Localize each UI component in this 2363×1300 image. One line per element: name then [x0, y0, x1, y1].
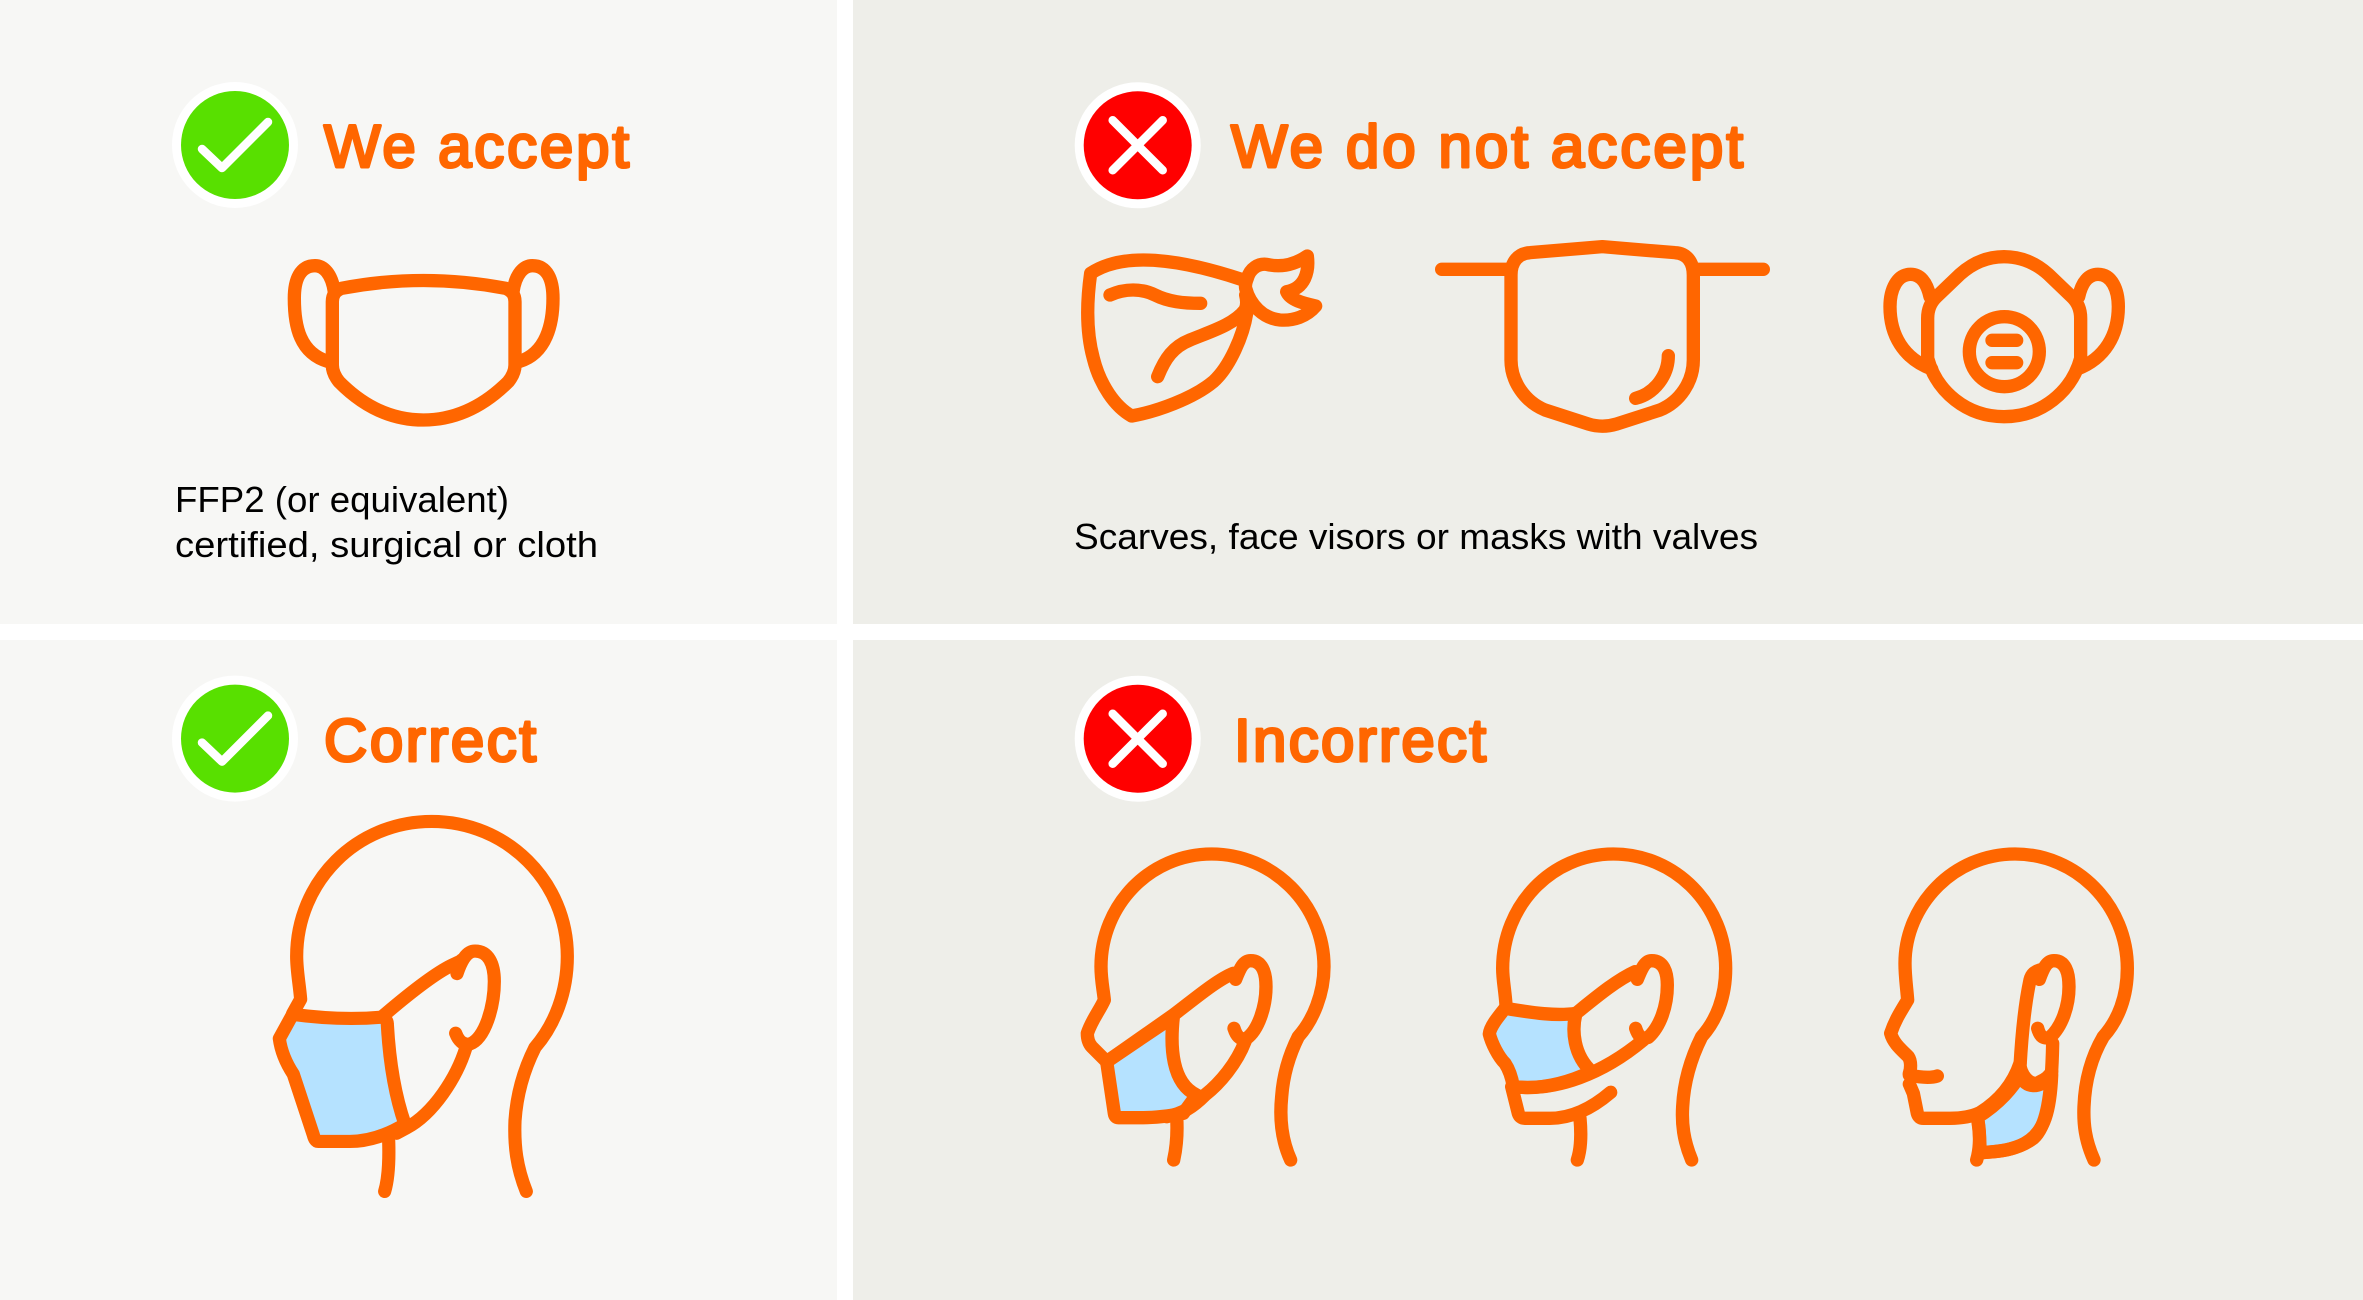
- text: rejected mask types: Scarves, face visors or masks with valves: [1074, 516, 1758, 557]
- icon: surgical mask: [294, 266, 553, 420]
- illustration: mask with chin exposed: [1489, 854, 1726, 1160]
- panel: correct: [0, 640, 837, 1300]
- icon: mask with valve: [1890, 257, 2118, 417]
- illustration: head wearing mask correctly: [279, 821, 567, 1191]
- heading: incorrect: Incorrect: [1234, 707, 1486, 774]
- icon: green check badge: [172, 676, 298, 802]
- icon: face visor: [1442, 247, 1763, 426]
- heading: correct: Correct: [324, 707, 536, 774]
- text: accepted mask types: certified, surgical or cloth: [175, 524, 598, 565]
- icon: scarf: [1088, 256, 1316, 416]
- icon: red cross badge: [1075, 82, 1201, 208]
- text: accepted mask types: FFP2 (or equivalent): [175, 479, 509, 520]
- text: accepted mask types: [175, 479, 598, 565]
- icon: green check badge: [172, 82, 298, 208]
- heading: we do not accept: We do not accept: [1231, 113, 1743, 180]
- icon: red cross badge: [1075, 676, 1201, 802]
- illustration: mask below nose and off one side: [1087, 854, 1324, 1160]
- panel: we accept: [0, 0, 837, 624]
- panel: incorrect: [853, 640, 2363, 1300]
- heading: we accept: We accept: [324, 113, 629, 180]
- panel: we do not accept: [853, 0, 2363, 624]
- illustration: mask pulled down under chin: [1891, 854, 2127, 1160]
